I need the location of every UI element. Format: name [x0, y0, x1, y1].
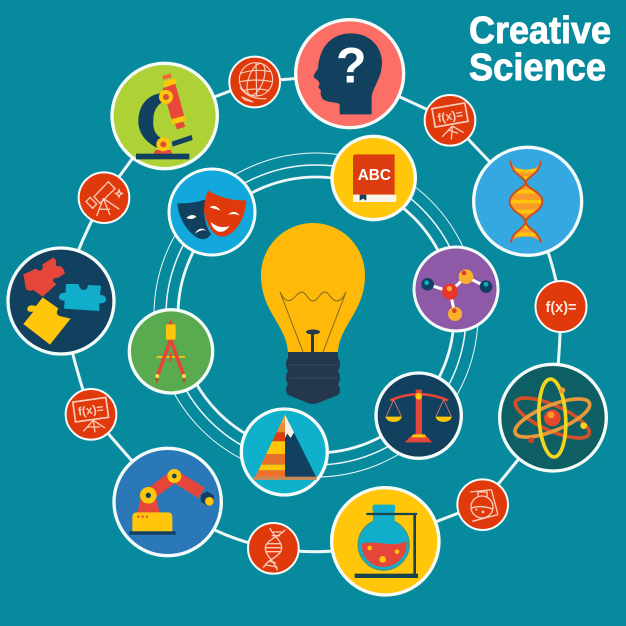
masks circle	[169, 169, 255, 255]
scales circle	[376, 373, 461, 458]
small icon: flask outline	[457, 479, 508, 530]
small icon: formula board left	[66, 389, 116, 440]
light bulb	[261, 223, 365, 404]
mountain circle	[241, 409, 327, 495]
small icon: formula board top: f(x)=	[436, 107, 464, 125]
molecule circle	[414, 247, 498, 331]
title: Science	[469, 47, 606, 89]
outer connector ring	[61, 74, 561, 552]
flask circle	[332, 488, 439, 595]
compass circle	[129, 310, 213, 393]
inner concentric rings	[154, 153, 478, 477]
small icon: formula text right	[536, 281, 586, 332]
microscope circle	[112, 63, 217, 169]
small icon: telescope	[79, 172, 129, 223]
small icon: formula text right: f(x)=	[545, 300, 577, 316]
head with question mark circle: ?	[336, 38, 367, 94]
abc book circle: ABC	[358, 167, 391, 184]
puzzle circle	[8, 248, 114, 354]
abc book circle	[332, 136, 415, 220]
title	[469, 10, 611, 89]
small icon: formula board top	[425, 95, 475, 146]
head with question mark circle	[296, 20, 404, 128]
robot arm circle	[114, 448, 221, 556]
dna circle	[474, 147, 582, 255]
small icon: globe	[229, 57, 280, 107]
atom circle	[500, 364, 606, 471]
small icon: formula board left: f(x)=	[77, 401, 104, 419]
small icon: dna outline	[248, 523, 299, 574]
title: Creative	[469, 10, 611, 52]
